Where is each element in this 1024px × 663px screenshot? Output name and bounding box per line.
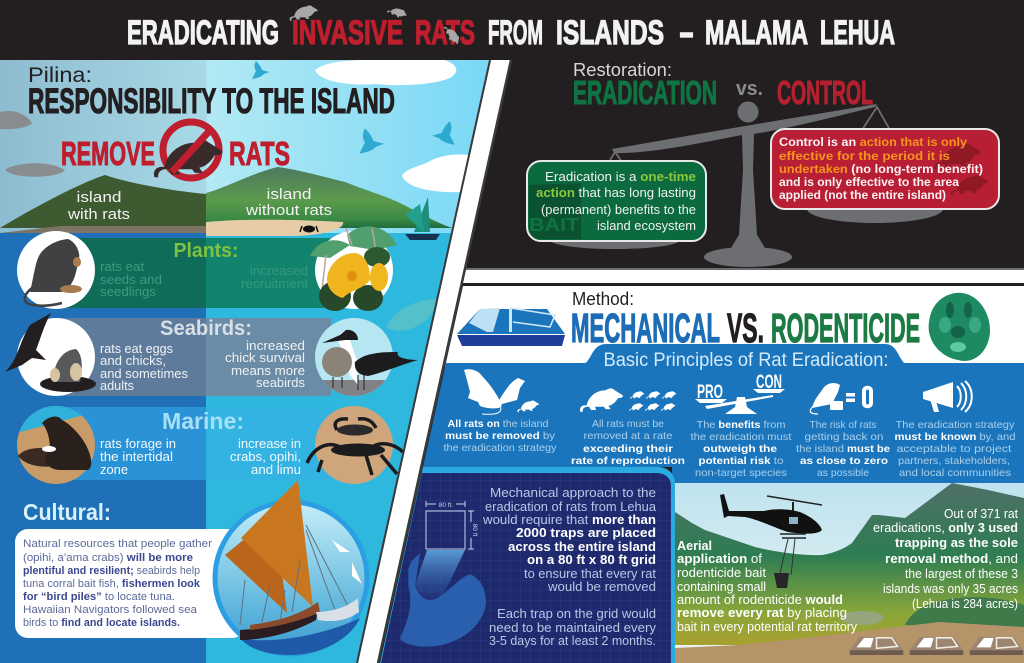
blue principles panel: [423, 363, 1024, 483]
band: seabirds: [5, 313, 418, 400]
heading: marine: Marine:: [162, 408, 244, 434]
title text: -: [679, 14, 694, 52]
icon: three traps: [850, 637, 1023, 655]
title text: INVASIVE: [292, 14, 403, 52]
text: eradication description: action that has long lasting: [536, 186, 696, 200]
icon: pro con balance: [695, 372, 785, 414]
text: principle 5: acceptable to project: [896, 443, 1012, 455]
text: out of 371 rat eradications: islands was only 35 acres: [883, 582, 1018, 596]
icon: hand placing trap: [400, 550, 486, 647]
text: eradication description: Eradication is a one-time: [545, 170, 696, 184]
panel: restoration eradication vs control: [527, 59, 999, 267]
text: increase in crabs: [230, 437, 301, 477]
text: principle 4: The risk of rats: [810, 419, 876, 431]
text: mechanical approach: 3-5 days for at least 2 months.: [489, 634, 656, 648]
title text: MALAMA: [705, 14, 808, 52]
text: mechanical approach: on a 80 ft x 80 ft grid: [527, 553, 656, 567]
text: rats eat eggs: [100, 342, 188, 393]
text: principle 2: rate of reproduction: [571, 455, 685, 467]
title banner: [127, 3, 895, 52]
icon: dark rats: [934, 144, 988, 196]
text: principle 1: must be removed by: [445, 430, 556, 442]
text: aerial application: rodenticide bait: [677, 566, 767, 580]
text: mechanical approach: 2000 traps are placed: [516, 526, 656, 540]
text: control description: effective for the period it is: [779, 151, 950, 163]
icon: bait bucket: [529, 183, 581, 239]
icon: rats on title: [290, 3, 461, 47]
white divider band: [460, 270, 1024, 283]
text: rats eat eggs: and sometimes: [100, 367, 188, 381]
band: plants: [17, 226, 397, 311]
text: aerial application: Aerial: [677, 539, 712, 553]
text: mechanical approach: to ensure that every rat: [524, 567, 657, 581]
text: principle 2: [571, 418, 685, 467]
text: aerial application: remove every rat by placing: [677, 606, 847, 620]
panel: method: [380, 286, 1024, 663]
icon: trap grid diagram: 80 ft.: [439, 502, 453, 509]
text: principle 5: [894, 419, 1016, 479]
icon: bait bucket: BAIT: [529, 215, 579, 235]
panel: Pilina responsibility to the island: [0, 60, 491, 663]
sky: [0, 60, 491, 233]
ground: [675, 622, 1024, 663]
label: island without rats: [245, 186, 332, 219]
mountains: [675, 483, 1024, 645]
remove rats sign: REMOVE: [61, 135, 155, 172]
band: marine: [17, 406, 403, 484]
text: control description: [779, 137, 983, 202]
text: rats eat eggs: adults: [100, 379, 134, 393]
text: mechanical approach: need to be maintained every: [489, 621, 657, 635]
icon: canoe: [405, 197, 440, 240]
text: rats eat seeds: [100, 260, 162, 299]
text: principle 3: the eradication must: [690, 431, 792, 443]
text: aerial application: bait in every potential rat territory: [677, 620, 858, 634]
icon: sooty tern and chick: [315, 318, 418, 400]
text: principle 2: exceeding their: [583, 443, 673, 455]
text: eradication description: [536, 170, 696, 233]
text: increase in crabs: increase in: [238, 437, 301, 451]
text: increased chick survival: chick survival: [225, 351, 305, 365]
lower hill: [905, 597, 1024, 628]
callout: cultural text: Hawaiian Navigators followed sea: [23, 604, 198, 616]
text: mechanical approach: would require that more than: [482, 513, 656, 527]
text: out of 371 rat eradications: trapping as the sole: [895, 536, 1018, 550]
text: rats forage: the intertidal: [100, 450, 173, 464]
panel: mechanical approach: [380, 467, 675, 663]
icon: helicopter with bait bucket: [720, 494, 822, 588]
icon: rat equals zero: [810, 383, 873, 414]
text: principle 3: The benefits from: [696, 419, 786, 431]
icon: rat in the intertidal zone: [17, 406, 95, 484]
icon: trap grid diagram: [426, 501, 478, 549]
heading: Pilina: Pilina:: [28, 63, 92, 87]
heading: method: Method:: [572, 288, 634, 309]
right island without rats: [206, 167, 452, 228]
icon: triggerfish: [386, 299, 437, 331]
heading: control: CONTROL: [777, 74, 873, 111]
label: island with rats: with rats: [67, 206, 130, 223]
text: aerial application: amount of rodenticide would: [677, 593, 843, 607]
remove rats sign: [61, 122, 290, 178]
title text: FROM: [488, 14, 543, 52]
text: out of 371 rat eradications: Out of 371 rat: [944, 507, 1019, 521]
text: out of 371 rat eradications: eradications, only 3 used: [873, 521, 1018, 535]
text: out of 371 rat eradications: the largest of these 3: [905, 567, 1018, 581]
balance scale: [550, 102, 943, 267]
tab: basic principles: Basic Principles of Rat Eradication:: [604, 350, 888, 371]
icon: seabirds in sky: [252, 61, 455, 154]
icon: all rats: [464, 369, 539, 414]
text: principle 3: potential risk to: [698, 455, 784, 467]
icon: megaphone: [923, 381, 972, 412]
callout: cultural text: for “bird piles” to locate tuna.: [23, 591, 175, 603]
text: principle 4: getting back on: [804, 431, 884, 443]
panel: aerial application: [675, 483, 1024, 663]
callout: cultural text: [15, 529, 245, 638]
title text: ISLANDS: [556, 14, 664, 52]
heading: plants: Plants:: [174, 239, 238, 262]
text: rats eat eggs: rats eat eggs: [100, 342, 173, 356]
callout: cultural text: birds to find and locate islands.: [23, 617, 180, 629]
left island with rats: [0, 175, 206, 228]
text: increased recruitment: increased: [250, 264, 308, 278]
text: increase in crabs: and limu: [251, 463, 301, 477]
text: rats forage: [100, 437, 176, 477]
text: principle 5: partners, stakeholders,: [898, 455, 1010, 467]
text: principle 2: removed at a rate: [584, 430, 673, 442]
text: eradication description: (permanent) benefits to the: [541, 203, 696, 217]
clouds: [0, 60, 470, 192]
text: rats eat seeds: rats eat: [100, 260, 145, 274]
icon: crab on beach: [300, 226, 318, 232]
heading: vs: VS.: [727, 305, 764, 351]
text: increased chick survival: means more: [231, 364, 305, 378]
heading: cultural: Cultural:: [23, 499, 111, 525]
heading: eradication: ERADICATION: [573, 74, 717, 111]
text: rats eat seeds: seeds and: [100, 273, 162, 287]
text: rats eat eggs: and chicks,: [100, 354, 166, 368]
text: mechanical approach: would be removed: [547, 580, 656, 594]
text: principle 1: All rats on the island: [448, 418, 549, 430]
label: island without rats: island: [266, 186, 312, 203]
text: aerial application: application of: [677, 552, 763, 566]
callout: cultural text: plentiful and resilient; seabirds help: [23, 565, 200, 577]
icon: hibiscus flower: [310, 226, 397, 311]
remove rats sign: RATS: [229, 135, 290, 172]
icon: voyaging canoe: [215, 480, 367, 655]
label: island with rats: [67, 189, 130, 223]
callout: cultural text: (opihi, a’ama crabs) will be more: [23, 552, 193, 564]
text: principle 3: outweigh the: [703, 443, 777, 455]
text: principle 4: [796, 419, 890, 479]
text: mechanical approach: across the entire island: [508, 540, 656, 554]
text: principle 1: [444, 418, 557, 454]
callout: control: [771, 129, 999, 209]
mist: [840, 611, 884, 625]
heading: mechanical: MECHANICAL: [571, 305, 720, 351]
text: increased chick survival: increased: [246, 339, 305, 353]
text: principle 4: the island must be: [796, 443, 890, 455]
beaches: [0, 226, 206, 233]
text: out of 371 rat eradications: (Lehua is 284 acres): [912, 597, 1018, 611]
text: principle 4: as close to zero: [800, 455, 888, 467]
icon: crabs: [307, 406, 403, 484]
text: principle 2: All rats must be: [592, 418, 664, 430]
text: mechanical approach: [482, 486, 657, 648]
text: control description: applied (not the entire island): [779, 190, 946, 202]
text: principle 5: and local communities: [899, 467, 1011, 479]
text: increased chick survival: seabirds: [256, 376, 305, 390]
icon: pro con balance: PRO: [697, 382, 723, 403]
icon: snap trap: [457, 308, 565, 346]
callout: cultural text: tuna corral bait fish, fishermen look: [23, 578, 201, 590]
text: rats forage: rats forage in: [100, 437, 176, 451]
heading: vs: vs.: [736, 78, 763, 100]
icon: trap grid diagram: 80 ft: [471, 524, 478, 537]
text: principle 5: must be known by, and: [894, 431, 1016, 443]
text: rats eat seeds: seedlings: [100, 285, 156, 299]
text: eradication description: island ecosystem: [597, 219, 696, 233]
title text: ERADICATING: [127, 14, 279, 52]
text: rats forage: zone: [100, 463, 128, 477]
icon: pro con balance: CON: [756, 372, 782, 393]
white header: [445, 286, 1024, 367]
heading: restoration: Restoration:: [573, 59, 672, 80]
text: principle 4: as possible: [817, 467, 869, 479]
title text: [127, 14, 895, 52]
text: control description: and is only effective to the area: [779, 177, 960, 189]
text: control description: undertaken (no long-term benefit): [779, 164, 983, 176]
icon: rat attacking nest: [5, 313, 96, 396]
label: island with rats: island: [76, 189, 122, 206]
text: increase in crabs: crabs, opihi,: [230, 450, 301, 464]
text: principle 1: the eradication strategy: [444, 442, 557, 454]
text: increased recruitment: recruitment: [241, 277, 309, 291]
text: mechanical approach: Each trap on the grid would: [497, 607, 656, 621]
heading: seabirds: Seabirds:: [160, 316, 252, 340]
text: out of 371 rat eradications: [873, 507, 1019, 611]
title text: LEHUA: [820, 14, 895, 52]
icon: rat and offspring: [580, 388, 676, 412]
water: [0, 233, 206, 663]
title text: RATS: [415, 14, 475, 52]
text: out of 371 rat eradications: removal method , and: [885, 552, 1018, 566]
icon: rat eating seeds: [17, 231, 95, 309]
text: increased chick survival: [225, 339, 305, 390]
text: principle 3: [690, 419, 792, 479]
callout: eradication: [527, 161, 706, 241]
text: increased recruitment: [241, 264, 309, 291]
label: island without rats: without rats: [245, 202, 332, 219]
tab: basic principles: [580, 344, 910, 371]
white slash divider: [357, 60, 511, 663]
text: principle 5: The eradication strategy: [896, 419, 1015, 431]
text: principle 3: non-target species: [695, 467, 787, 479]
callout: cultural text: Natural resources that people gather: [23, 538, 212, 550]
text: mechanical approach: Mechanical approach to the: [490, 486, 656, 500]
icon: rodenticide pellet: [929, 293, 990, 361]
heading: responsibility to the island: RESPONSIBILITY TO THE ISLAND: [28, 82, 395, 121]
text: aerial application: [677, 539, 858, 634]
text: aerial application: containing small: [677, 580, 766, 594]
text: control description: Control is an action that is only: [779, 137, 968, 149]
text: mechanical approach: eradication of rats from Lehua: [485, 500, 656, 514]
